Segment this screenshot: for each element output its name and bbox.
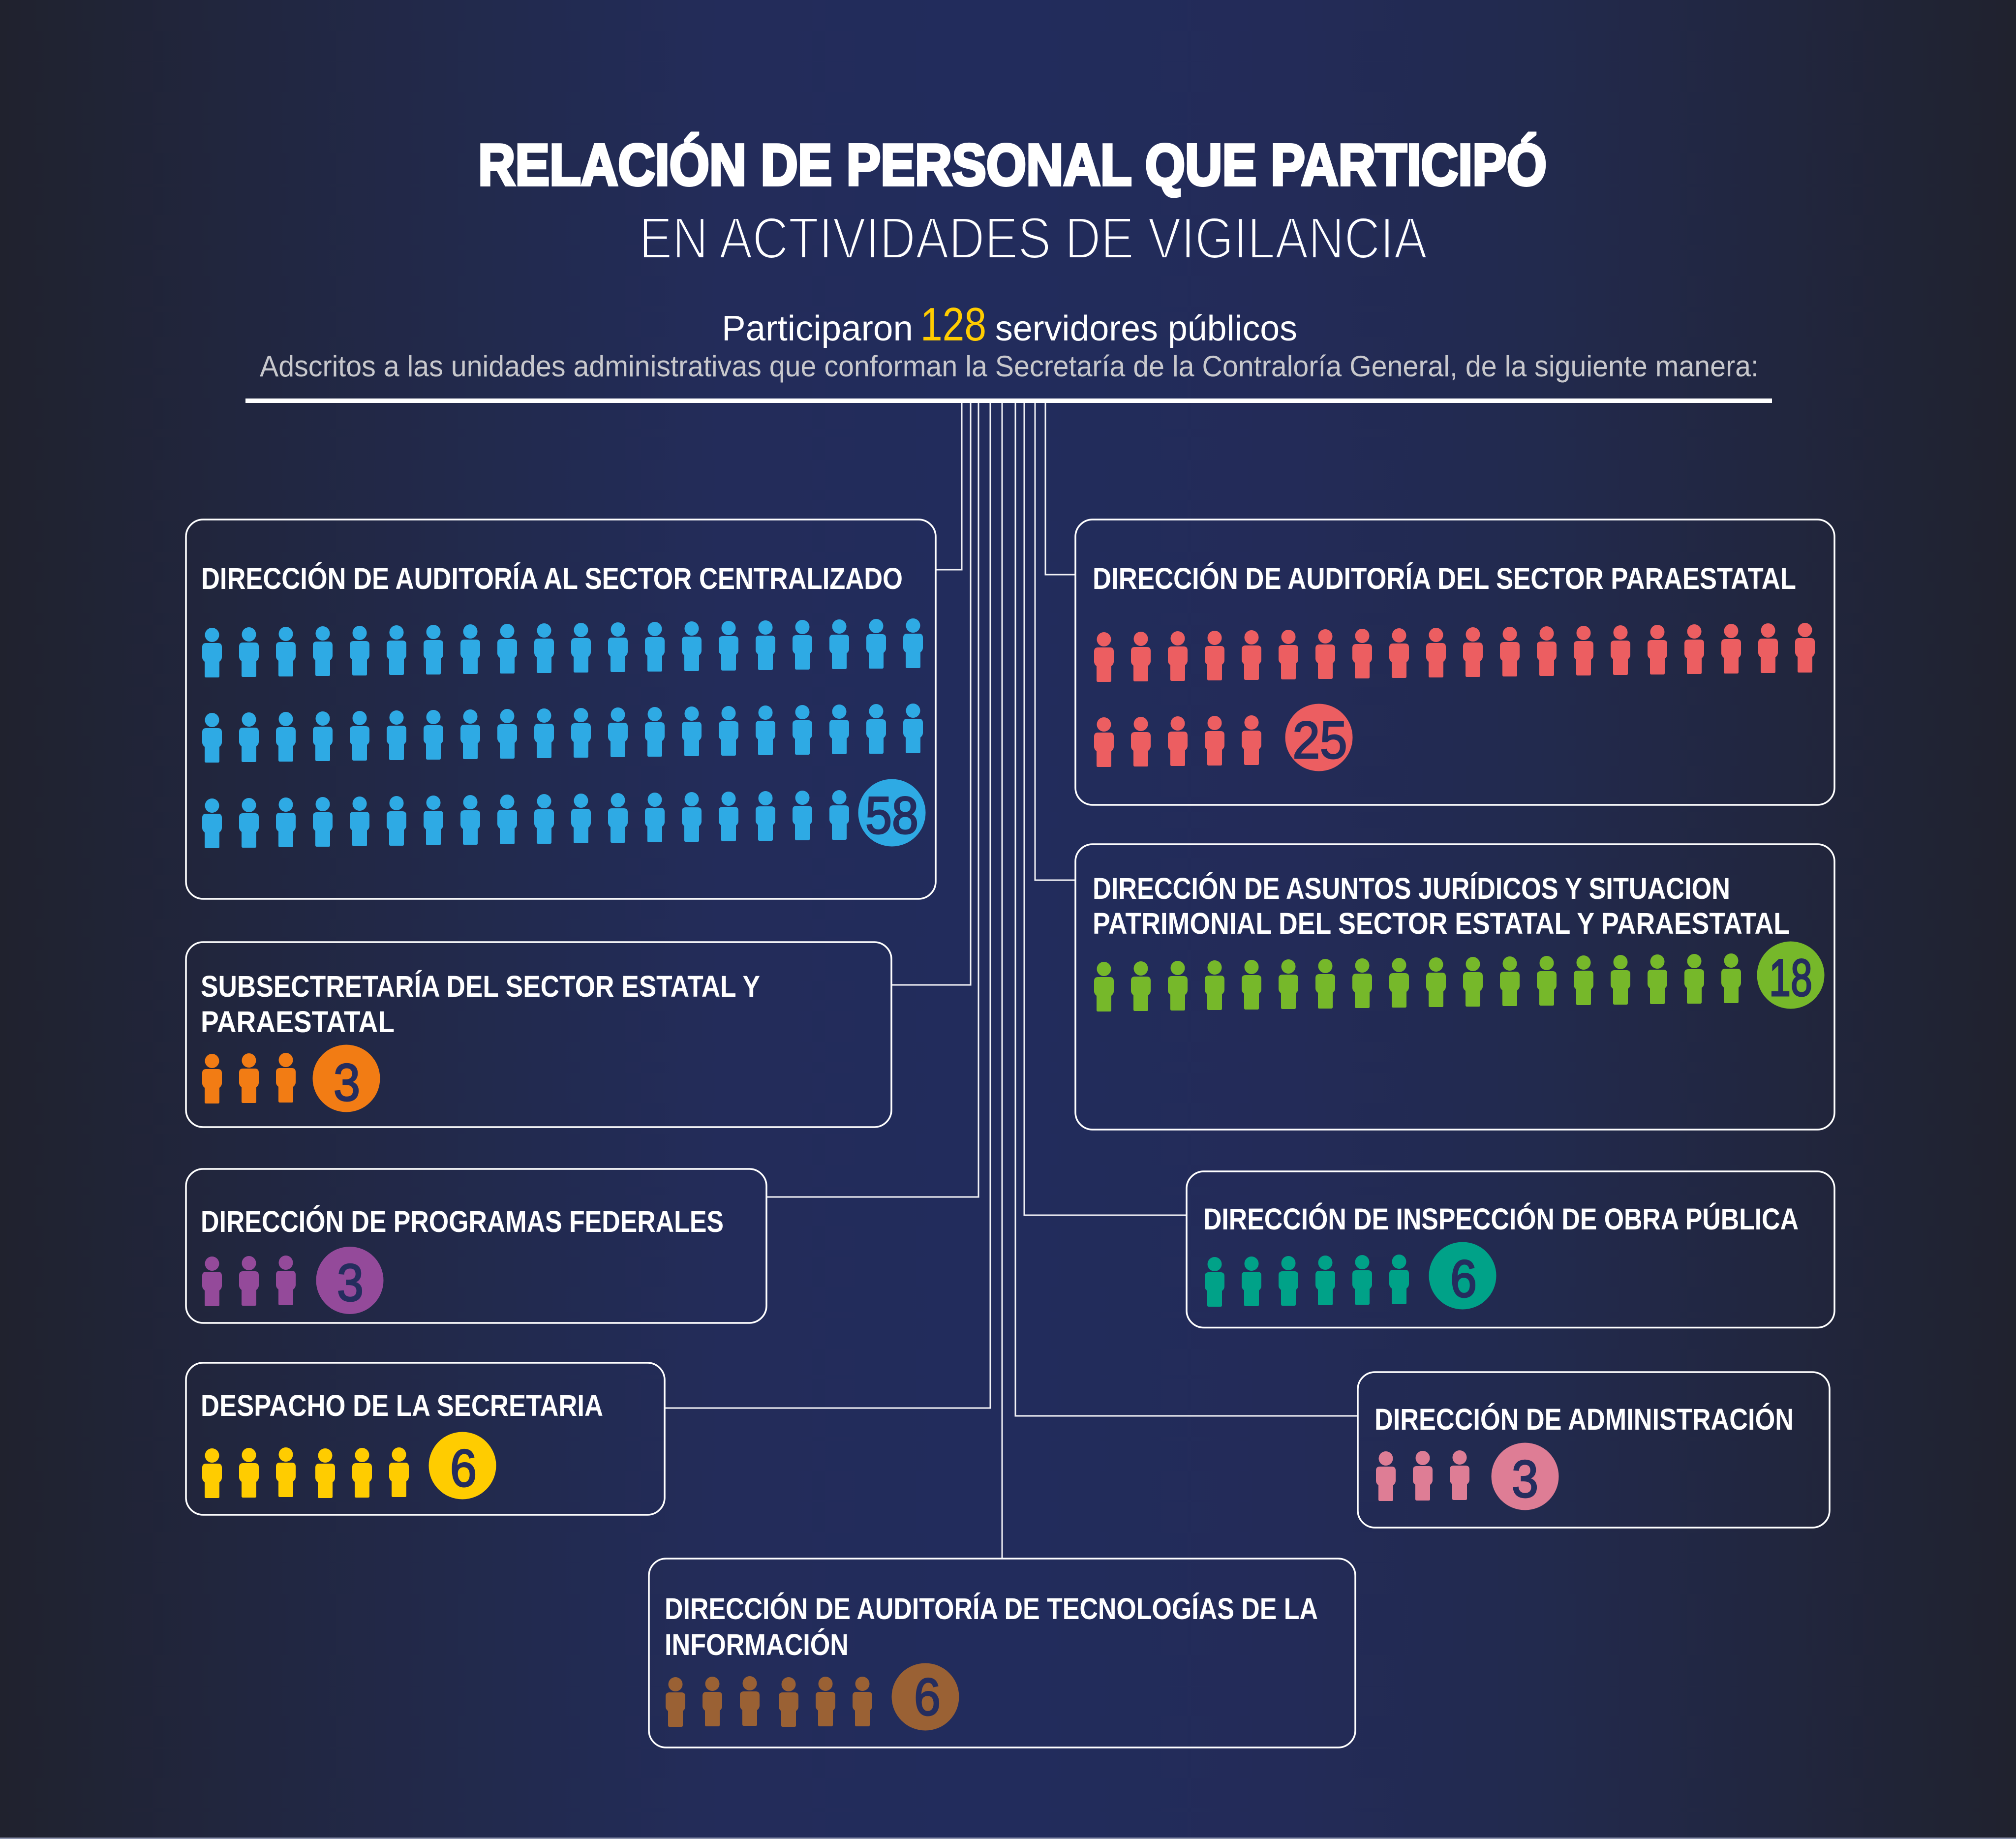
count badge 3: 3 xyxy=(334,1053,360,1112)
panel: Despacho de la Secretaria: DESPACHO DE LA SECRETARIA xyxy=(201,1389,603,1422)
people row 1 xyxy=(202,618,923,677)
count badge 3 xyxy=(316,1247,384,1314)
people row 2 xyxy=(1094,715,1261,767)
panel: Dirección de Auditoría al Sector Centralizado: DIRECCIÓN DE AUDITORÍA AL SECTOR CENTRALIZADO xyxy=(201,562,903,595)
panel: Dirección de Auditoría del Sector Paraestatal xyxy=(1075,520,1834,805)
people row 2 xyxy=(202,704,923,763)
people xyxy=(1376,1450,1469,1501)
panel: Dirección de Asuntos Jurídicos: DIRECCIÓN DE ASUNTOS JURÍDICOS Y SITUACION xyxy=(1093,872,1730,905)
count badge 58: 58 xyxy=(865,786,918,845)
people xyxy=(1205,1255,1409,1307)
people xyxy=(202,1256,296,1306)
title: RELACIÓN DE PERSONAL QUE PARTICIPÓ xyxy=(478,132,1547,198)
panel: Dirección de Auditoría de Tecnologías de la Información: INFORMACIÓN xyxy=(665,1628,849,1661)
participants summary xyxy=(722,298,1297,351)
count badge 6 xyxy=(429,1432,496,1500)
participants summary: Participaron xyxy=(722,309,913,348)
title xyxy=(478,132,1547,271)
subtitle: Adscritos a las unidades administrativas que conforman la Secretaría de la Contraloría General, de la siguiente manera: xyxy=(260,350,1759,383)
count badge 18 xyxy=(1757,942,1824,1009)
people xyxy=(666,1676,872,1727)
count badge 6 xyxy=(1429,1242,1497,1310)
people row 1 xyxy=(1094,623,1815,682)
header rule xyxy=(245,398,1772,403)
panel: Dirección de Auditoría al Sector Centralizado xyxy=(186,520,936,899)
participants summary: servidores públicos xyxy=(995,309,1297,348)
connector lines xyxy=(665,403,1358,1559)
panel: Dirección de Inspección de Obra Pública xyxy=(1187,1171,1834,1327)
panel: Dirección de Auditoría del Sector Paraestatal: DIRECCIÓN DE AUDITORÍA DEL SECTOR PARAESTATAL xyxy=(1093,562,1796,595)
count badge 6: 6 xyxy=(914,1667,941,1726)
participants summary: 128 xyxy=(920,298,986,351)
panel: Dirección de Administración xyxy=(1358,1372,1830,1528)
count badge 3 xyxy=(1492,1442,1558,1510)
panel: Subsecretaría del Sector Estatal y Paraestatal xyxy=(186,942,891,1127)
people xyxy=(1094,953,1741,1011)
panel: Dirección de Asuntos Jurídicos: PATRIMONIAL DEL SECTOR ESTATAL Y PARAESTATAL xyxy=(1093,907,1790,940)
count badge 3 xyxy=(313,1045,380,1112)
panel: Despacho de la Secretaria xyxy=(186,1363,665,1515)
panel: Dirección de Auditoría de Tecnologías de la Información xyxy=(649,1559,1355,1747)
count badge 18: 18 xyxy=(1769,948,1812,1007)
count badge 3: 3 xyxy=(1512,1449,1538,1508)
people xyxy=(202,1053,296,1103)
panel: Dirección de Asuntos Jurídicos xyxy=(1075,844,1834,1130)
people xyxy=(202,1447,409,1498)
panel: Dirección de Inspección de Obra Pública: DIRECCIÓN DE INSPECCIÓN DE OBRA PÚBLICA xyxy=(1203,1202,1799,1236)
count badge 6 xyxy=(891,1663,959,1731)
count badge 6: 6 xyxy=(1450,1249,1477,1308)
panel: Subsecretaría del Sector Estatal y Paraestatal: SUBSECTRETARÍA DEL SECTOR ESTATAL Y xyxy=(201,970,760,1003)
count badge 3: 3 xyxy=(337,1253,364,1312)
count badge 25: 25 xyxy=(1293,710,1347,769)
people row 3 xyxy=(202,790,849,848)
title: EN ACTIVIDADES DE VIGILANCIA xyxy=(639,206,1428,271)
count badge 6: 6 xyxy=(450,1439,477,1498)
panel: Dirección de Auditoría de Tecnologías de la Información: DIRECCIÓN DE AUDITORÍA DE TECNOLOGÍAS DE LA xyxy=(665,1592,1318,1625)
panel: Dirección de Administración: DIRECCIÓN DE ADMINISTRACIÓN xyxy=(1375,1403,1794,1436)
panel: Dirección de Programas Federales: DIRECCIÓN DE PROGRAMAS FEDERALES xyxy=(201,1205,724,1238)
panel: Dirección de Programas Federales xyxy=(186,1169,766,1323)
panel: Subsecretaría del Sector Estatal y Paraestatal: PARAESTATAL xyxy=(201,1005,395,1039)
